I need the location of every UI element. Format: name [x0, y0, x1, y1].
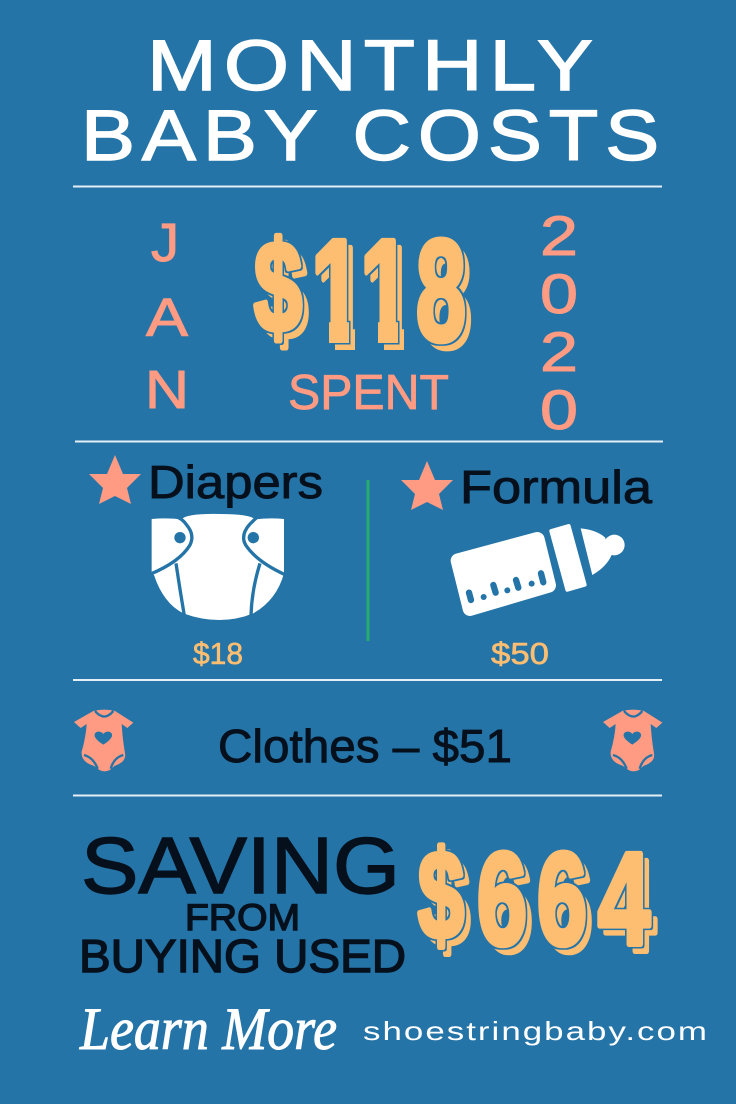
title [81, 27, 666, 176]
icon: diaper [151, 514, 285, 620]
clothes label: Clothes – $51 [218, 720, 512, 772]
month label: A [146, 288, 188, 348]
year label: 0 [540, 262, 578, 325]
amount: $118: 1 [360, 210, 411, 371]
savings caption [79, 821, 406, 982]
month label: J [151, 213, 179, 273]
icon: onesie right [603, 710, 662, 771]
amount: $118: $ [254, 216, 302, 359]
formula heading: Formula [460, 461, 652, 513]
icon: star [89, 455, 141, 504]
year label: 2 [540, 320, 578, 383]
amount: $664: 4 [598, 825, 650, 972]
title: BABY COSTS [81, 97, 666, 176]
savings caption: FROM [185, 897, 300, 938]
learn more script: Learn More [79, 996, 337, 1062]
panel: diapers [89, 455, 323, 671]
title: MONTHLY [147, 27, 600, 106]
formula cost: $50 [491, 636, 549, 671]
amount: $664: $ [418, 827, 464, 965]
amount: $118 [253, 232, 472, 352]
website: shoestringbaby.com [363, 1016, 709, 1046]
diapers cost: $18 [193, 636, 243, 671]
icon: star [401, 461, 453, 510]
year label: 2 [540, 204, 578, 267]
panel: formula [401, 461, 652, 671]
total spent [253, 232, 472, 410]
amount: $664: 6 [477, 825, 527, 972]
month label [145, 213, 189, 420]
amount: $118: 8 [416, 210, 466, 371]
amount: $664 [418, 825, 650, 972]
spent label: SPENT [288, 366, 449, 420]
year label: 0 [540, 378, 578, 441]
icon: baby bottle [458, 526, 625, 609]
diapers heading: Diapers [148, 456, 323, 508]
month label: N [145, 360, 189, 420]
panel: clothes [74, 710, 662, 772]
savings caption: BUYING USED [79, 930, 406, 982]
amount: $118: 1 [311, 210, 362, 371]
amount: $664: 6 [537, 825, 587, 972]
icon: onesie left [74, 710, 133, 771]
savings caption: SAVING [81, 821, 400, 910]
panel: savings [79, 821, 650, 982]
year label [540, 204, 578, 441]
